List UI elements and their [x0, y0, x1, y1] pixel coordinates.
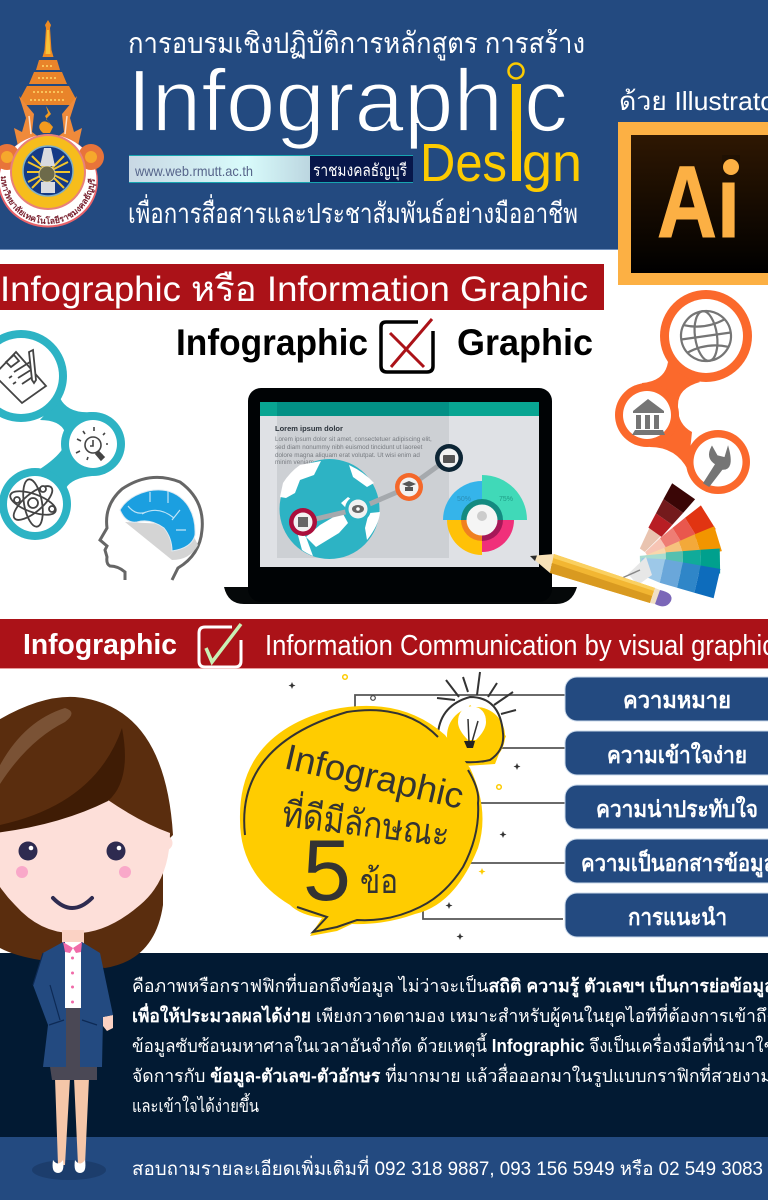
screen text: dolore magna aliquam erat volutpat. Ut wisi enim ad [275, 452, 420, 459]
Infographic vs Graphic heading: Graphic [457, 322, 593, 363]
Infographic vs Graphic heading [176, 319, 593, 372]
website bar: www.web.rmutt.ac.th [134, 163, 253, 179]
speech bubble: 5 [303, 823, 351, 919]
title: Infographic: Infograph [127, 51, 503, 150]
eyes and cheeks [16, 842, 131, 908]
university logo: มหาวิทยาลัยเทคโนโลยีราชมงคลธัญบุรี [0, 176, 97, 224]
globe illustration [280, 459, 380, 559]
characteristic pills [565, 677, 768, 937]
hair highlight [0, 708, 72, 792]
description text [132, 973, 768, 1116]
donut chart: 50% [457, 496, 471, 503]
hand [103, 1015, 113, 1031]
description text: และเข้าใจได้ง่ายขึ้น [132, 1093, 259, 1116]
hair back [0, 697, 173, 968]
screen text [275, 424, 432, 466]
pill: data identity [565, 839, 768, 883]
title line 1: การอบรมเชิงปฏิบัติการหลักสูตร การสร้าง [128, 28, 585, 61]
screen text: Lorem ipsum dolor [275, 424, 343, 433]
icon: clipboard [0, 350, 46, 403]
face [0, 800, 170, 933]
jacket [33, 942, 113, 1067]
icon: museum [632, 399, 665, 435]
pencil [530, 554, 672, 606]
speech bubble: ที่ดีมีลักษณะ [280, 789, 452, 854]
pill: guidance [565, 893, 768, 937]
website bar [129, 155, 413, 183]
title: Infographic: c [524, 51, 568, 150]
connector lines [355, 695, 566, 919]
light bulb callout [437, 672, 516, 766]
header panel [0, 0, 768, 250]
pill: understandable: ความเข้าใจง่าย [607, 741, 747, 768]
Infographic vs Graphic heading: Infographic [176, 322, 368, 363]
pill: meaning: ความหมาย [623, 687, 731, 713]
banner: Infographic check: Infographic [23, 629, 177, 661]
neck [62, 930, 84, 948]
title: Infographic: i [506, 51, 526, 150]
Ai logo [618, 122, 768, 285]
head with brain icon [100, 477, 202, 580]
contact band [0, 1137, 768, 1200]
Ai logo: Ai [657, 145, 740, 259]
donut chart: 75% [499, 496, 513, 503]
description panel [0, 953, 768, 1137]
colour swatch fan [622, 483, 722, 598]
ear [158, 836, 172, 850]
website bar: ราชมงคลธัญบุรี [313, 161, 407, 181]
hair fringe [0, 728, 125, 833]
title: Design: gn [522, 133, 582, 193]
university logo [0, 20, 104, 228]
speech bubble: Infographic [281, 736, 468, 817]
pill: meaning [565, 677, 768, 721]
shirt [63, 942, 82, 1067]
teal node cluster [0, 330, 125, 540]
screen text: minim veniam, quis [275, 459, 329, 466]
icon: globe [678, 308, 734, 364]
skirt [49, 1060, 97, 1080]
speech bubble: ข้อ [360, 863, 398, 901]
contact text: สอบถามรายละเอียดเพิ่มเติมที่ 092 318 9887, 093 156 5949 หรือ 02 549 3083 [132, 1155, 763, 1180]
title: Design: i [510, 133, 522, 193]
pill: understandable [565, 731, 768, 775]
icon: atom [7, 478, 59, 528]
screen text: sed diam nonummy nibh euismod tincidunt ut laoreet [275, 444, 423, 451]
pill: impressive [565, 785, 768, 829]
orange node cluster [615, 290, 752, 494]
title line 3: เพื่อการสื่อสารและประชาสัมพันธ์อย่างมืออาชีพ [128, 194, 578, 229]
pocket lines [33, 953, 97, 1025]
description text: ข้อมูลซับซ้อนมหาศาลในเวลาอันจำกัด ด้วยเหตุนี้ Infographic จึงเป็นเครื่องมือที่นำมาใช้ [132, 1033, 768, 1057]
title: Design: Des [420, 133, 507, 193]
icon: idea bulb [76, 427, 108, 460]
banner: Infographic or Information Graphic: Infographic หรือ Information Graphic [0, 270, 588, 309]
laptop [224, 388, 577, 604]
screen text: Lorem ipsum dolor sit amet, consectetuer adipiscing elit, [275, 436, 432, 443]
icon: wrench [704, 447, 730, 486]
legs and shoes [32, 1078, 106, 1180]
decorative stars [288, 675, 520, 940]
donut chart [443, 475, 527, 555]
description text: คือภาพหรือกราฟฟิกที่บอกถึงข้อมูล ไม่ว่าจะเป็นสถิติ ความรู้ ตัวเลขฯ เป็นการย่อข้อมูล [132, 973, 768, 998]
description text: จัดการกับ ข้อมูล-ตัวเลข-ตัวอักษร ที่มากมาย แล้วสื่อออกมาในรูปแบบกราฟิกที่สวยงาม [132, 1063, 768, 1088]
character illustration [0, 697, 173, 1180]
banner: Infographic check [0, 619, 768, 669]
speech bubble [240, 706, 482, 936]
pill: guidance: การแนะนำ [628, 904, 727, 930]
timeline [289, 444, 463, 536]
title: Design [420, 64, 582, 193]
